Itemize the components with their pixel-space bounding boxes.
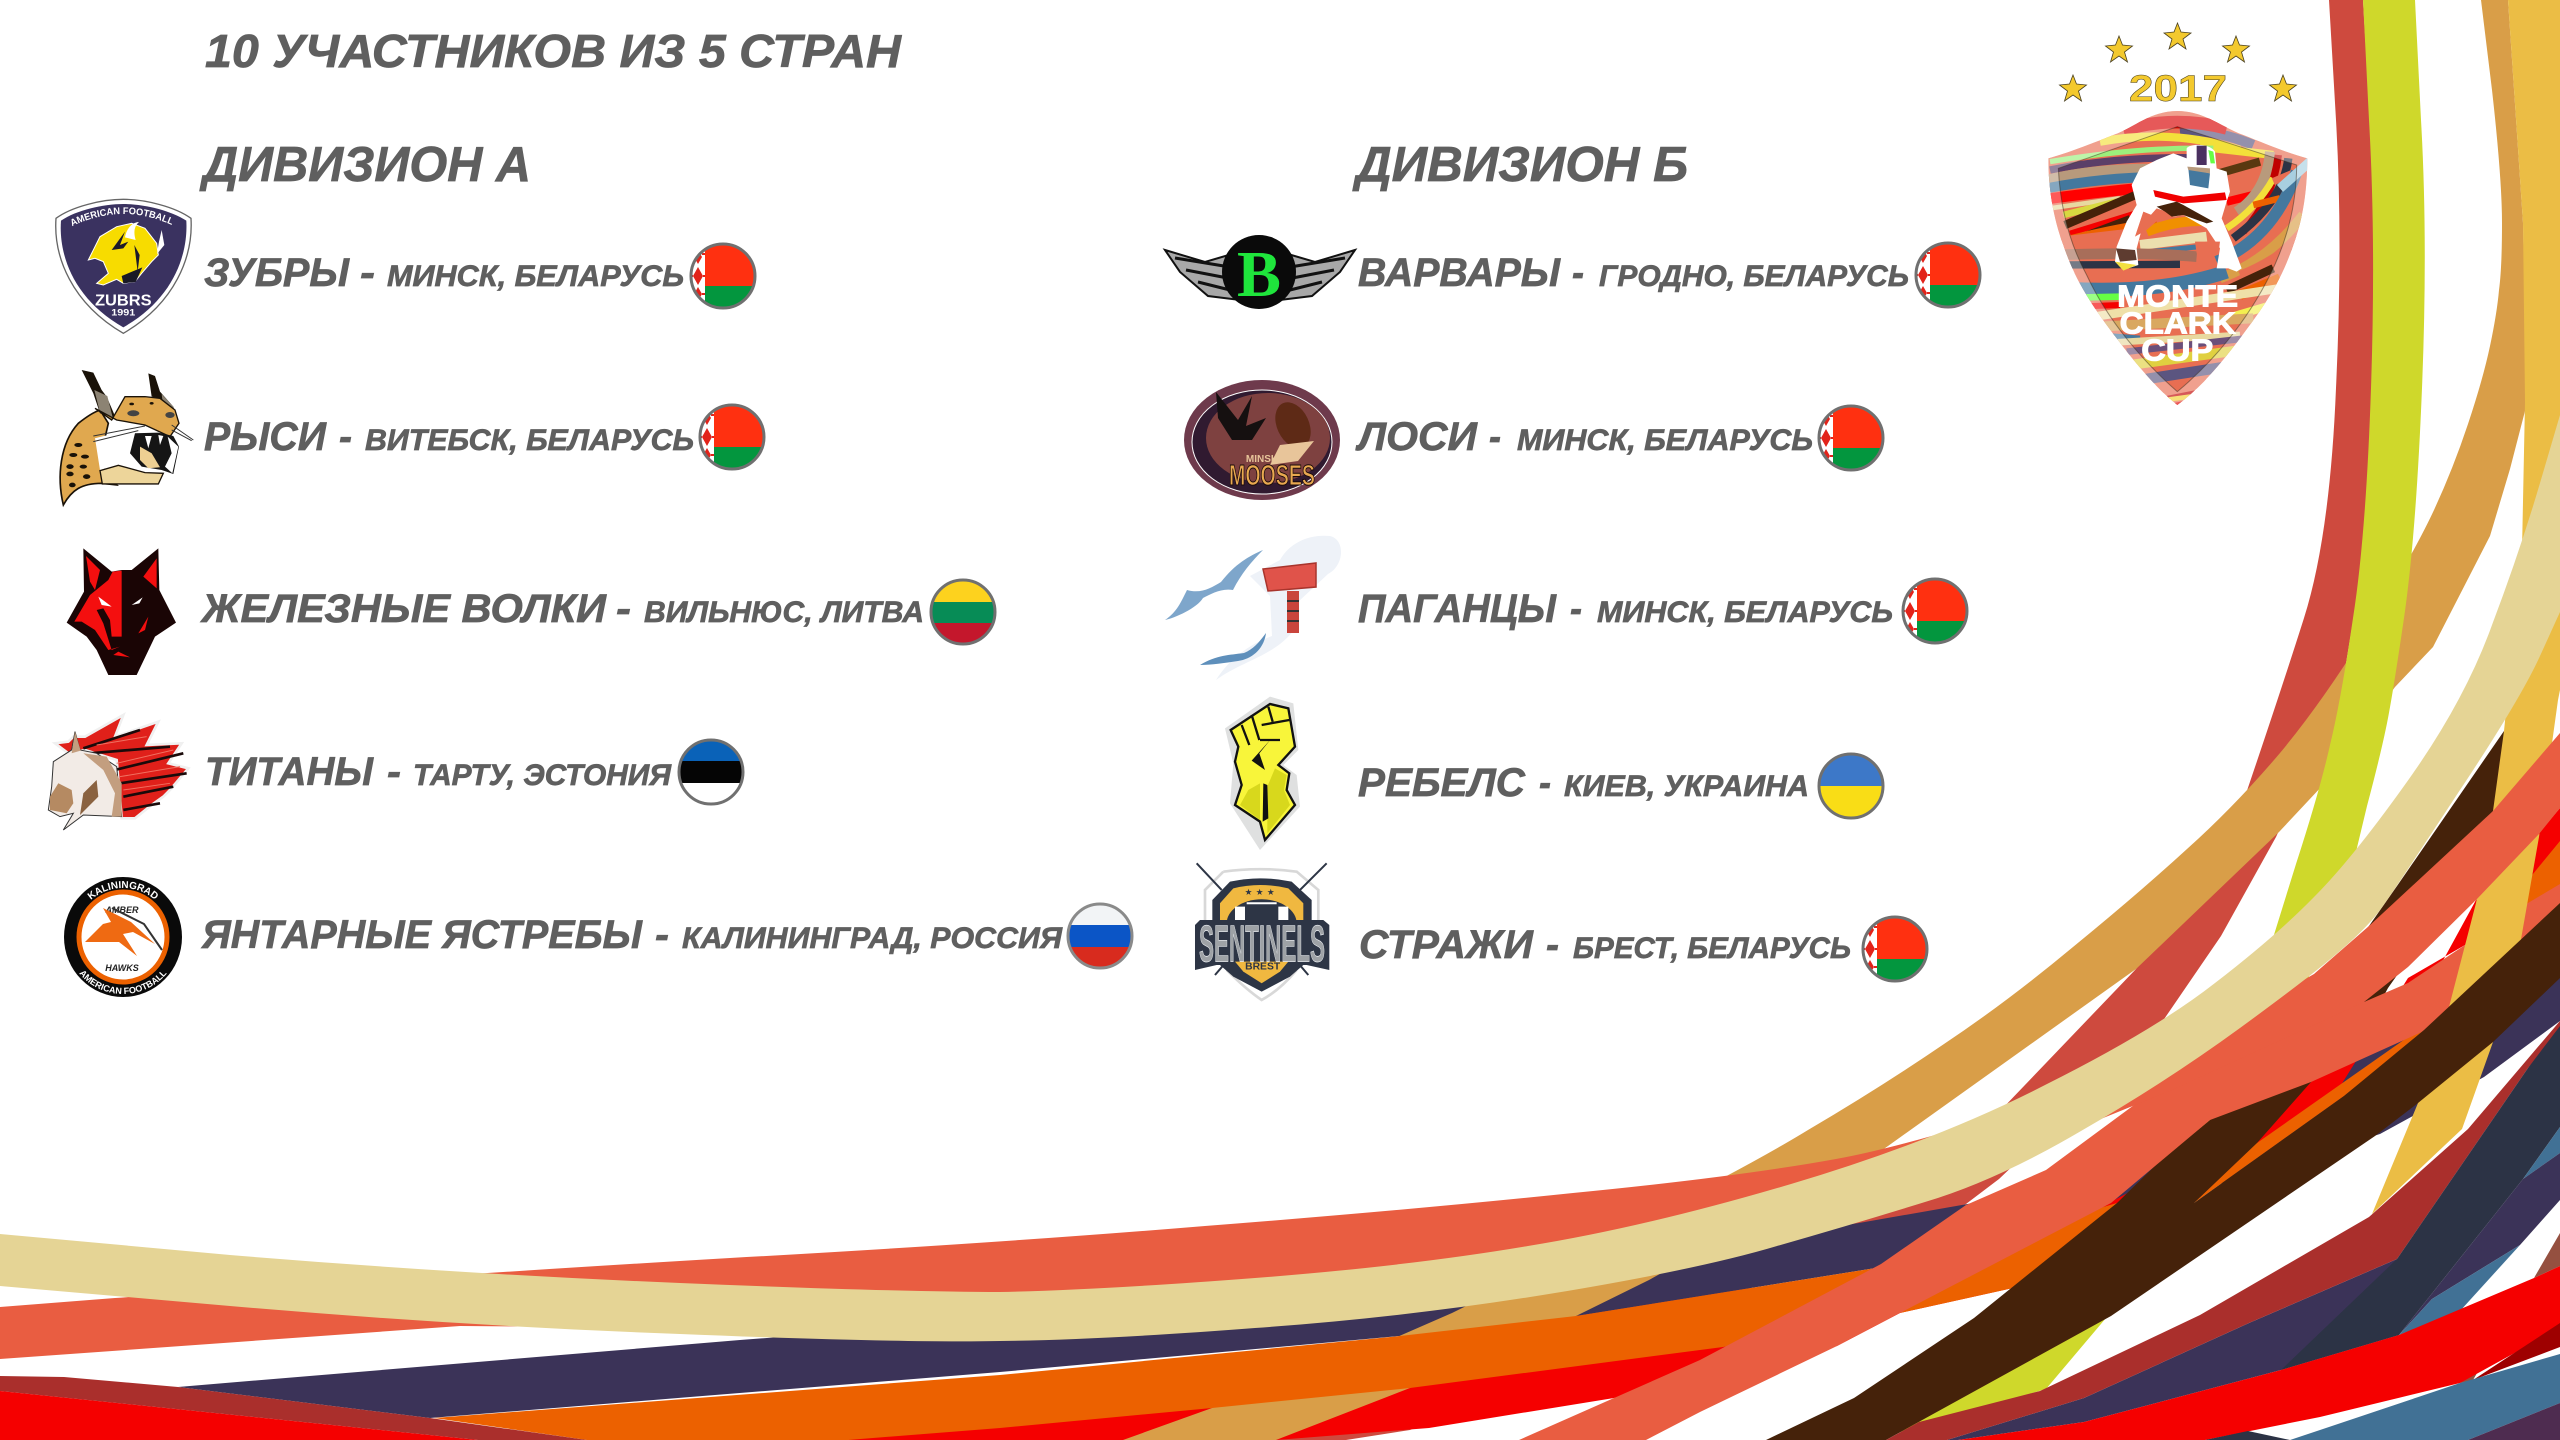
- team row: Рыси: [60, 370, 764, 505]
- team name: [205, 750, 672, 794]
- ribbon: blue sliver: [2523, 1127, 2560, 1179]
- logo: Pagans: [1165, 536, 1341, 680]
- team row: Паганцы: [1165, 536, 1967, 680]
- cup name: CLARK: [2120, 306, 2236, 341]
- ribbon: bottom navy: [1947, 1259, 2420, 1440]
- ribbon: deep red: [2473, 1323, 2560, 1380]
- team name: МИНСК, БЕЛАРУСЬ: [387, 260, 684, 293]
- logo: Monte Clark Cup: [2040, 23, 2315, 410]
- team name: [1358, 587, 1893, 631]
- team name: ЖЕЛЕЗНЫЕ ВОЛКИ: [200, 587, 607, 631]
- logo: Sentinels: BREST: [1245, 961, 1281, 972]
- team name: ПАГАНЦЫ: [1358, 587, 1557, 631]
- team row: Железные волки: [67, 548, 995, 675]
- team name: ВАРВАРЫ: [1358, 251, 1561, 295]
- team name: МИНСК, БЕЛАРУСЬ: [1597, 596, 1893, 629]
- team name: -: [339, 415, 352, 459]
- team name: РЫСИ: [204, 415, 327, 459]
- ribbon: brick: [1200, 0, 2377, 1440]
- logo: Mooses: MINSK: [1246, 454, 1279, 465]
- ribbon: bright red: [1958, 1266, 2560, 1440]
- cup name: CUP: [2141, 333, 2213, 368]
- year: 2017: [2129, 68, 2227, 109]
- team name: [201, 913, 1063, 957]
- stars: [2060, 23, 2296, 101]
- flag: Belarus: [691, 244, 755, 308]
- shield: [2040, 105, 2315, 410]
- team name: [204, 415, 694, 459]
- logo: Lynx: [60, 370, 193, 505]
- flag: Belarus: [1819, 406, 1883, 470]
- ribbon: upper coral: [0, 733, 2560, 1359]
- ribbon: brown triangles: [2460, 1233, 2560, 1383]
- team name: ВИТЕБСК, БЕЛАРУСЬ: [365, 424, 694, 457]
- team row: Лоси: [1184, 380, 1883, 500]
- heading: division B: ДИВИЗИОН Б: [1352, 138, 1688, 192]
- logo: Rebels: [1225, 697, 1300, 850]
- team row: Ребелс: [1225, 697, 1883, 850]
- ribbon: slate corner: [2205, 1431, 2290, 1440]
- team name: ТАРТУ, ЭСТОНИЯ: [413, 759, 672, 792]
- logo: Zubrs: AMERICAN FOOTBALL: [72, 207, 172, 226]
- team name: -: [1539, 761, 1551, 805]
- team name: СТРАЖИ: [1359, 923, 1534, 967]
- logo: Iron Wolves: [67, 548, 176, 675]
- flag: Ukraine: [1819, 754, 1883, 818]
- ribbon: dark red: [1886, 1021, 2560, 1440]
- team name: ВИЛЬНЮС, ЛИТВА: [644, 596, 924, 629]
- team name: [1358, 251, 1909, 295]
- ribbon: bottom-left dark red: [0, 1376, 587, 1440]
- ribbon: thin brown: [2117, 690, 2540, 1203]
- logo: Zubrs: ZUBRS: [95, 292, 152, 309]
- logo: Amber Hawks: [64, 877, 182, 997]
- ribbon: lower coral: [1519, 884, 2560, 1440]
- ribbon: lime: [1900, 0, 2425, 1432]
- ribbon: dark slate: [2281, 1026, 2560, 1370]
- ribbon: orange: [434, 841, 2560, 1440]
- team name: [1358, 761, 1809, 805]
- logo: Amber Hawks: HAWKS: [105, 963, 139, 973]
- logo: Amber Hawks: AMBER: [104, 905, 139, 915]
- team name: МИНСК, БЕЛАРУСЬ: [1517, 424, 1813, 457]
- cup name: MONTE: [2117, 279, 2238, 314]
- heading: division A: ДИВИЗИОН А: [199, 138, 531, 192]
- team name: ГРОДНО, БЕЛАРУСЬ: [1599, 260, 1909, 293]
- team name: -: [387, 750, 401, 794]
- logo: Barbarians: [1165, 235, 1355, 311]
- ribbon: beige: [0, 415, 2560, 1341]
- ribbon: lower blue: [2290, 1354, 2560, 1440]
- logo: Zubrs: [55, 198, 192, 334]
- team name: ЛОСИ: [1355, 415, 1478, 459]
- logo: Amber Hawks: KALININGRAD: [87, 881, 158, 900]
- team name: [200, 587, 924, 631]
- ribbon: tan: [1123, 0, 2525, 1440]
- ribbon: navy band right: [2399, 1153, 2560, 1335]
- team name: [204, 251, 684, 295]
- logo: Zubrs: 1991: [111, 307, 135, 317]
- logo: Titans: [48, 715, 188, 830]
- ribbon: blue band: [2399, 1245, 2520, 1335]
- ribbon: navy: [178, 930, 2560, 1418]
- team name: -: [1572, 251, 1584, 295]
- team name: ЯНТАРНЫЕ ЯСТРЕБЫ: [201, 913, 643, 957]
- flag: Belarus: [700, 405, 764, 469]
- team name: -: [1546, 923, 1559, 967]
- team row: Стражи: [1195, 863, 1927, 1000]
- team row: Стражи: SENTINELS: [1199, 915, 1325, 973]
- ribbon: big brown: [1766, 903, 2560, 1440]
- team name: -: [655, 913, 669, 957]
- flag: Lithuania: [931, 580, 995, 644]
- logo: Sentinels: ★★★: [1245, 888, 1278, 898]
- team name: БРЕСТ, БЕЛАРУСЬ: [1573, 932, 1851, 965]
- logo: Amber Hawks: AMERICAN FOOTBALL: [79, 971, 167, 994]
- flag: Estonia: [679, 740, 743, 804]
- cup name: [2117, 279, 2238, 368]
- team name: -: [616, 587, 631, 631]
- team name: -: [1489, 415, 1501, 459]
- ribbon: bottom-left red: [0, 1391, 478, 1440]
- team name: ЗУБРЫ: [204, 251, 350, 295]
- team row: Титаны: [48, 715, 743, 830]
- team name: ТИТАНЫ: [205, 750, 374, 794]
- player: [2115, 145, 2242, 272]
- flag: Russia: [1068, 904, 1132, 968]
- ribbon: red: [848, 808, 2560, 1440]
- team row: Зубры: [55, 198, 756, 334]
- team name: -: [1570, 587, 1582, 631]
- team row: Варвары: [1165, 235, 1980, 311]
- team name: РЕБЕЛС: [1358, 761, 1526, 805]
- team name: -: [360, 251, 375, 295]
- team row: Янтарные ястребы: [64, 877, 1134, 997]
- team name: КИЕВ, УКРАИНА: [1564, 770, 1809, 803]
- team name: [1355, 415, 1813, 459]
- logo: Sentinels: [1195, 863, 1329, 1000]
- team name: КАЛИНИНГРАД, РОССИЯ: [682, 922, 1063, 955]
- ribbon: gold: [2340, 0, 2560, 1260]
- flag: Belarus: [1903, 579, 1967, 643]
- logo: Mooses: MOOSES: [1229, 460, 1315, 492]
- logo: Mooses: [1184, 380, 1340, 500]
- team name: [1359, 923, 1851, 967]
- logo: Barbarians: B: [1237, 238, 1281, 311]
- ribbon: plum corner: [2468, 1403, 2560, 1440]
- title: 10 УЧАСТНИКОВ ИЗ 5 СТРАН: [205, 25, 902, 77]
- flag: Belarus: [1863, 917, 1927, 981]
- flag: Belarus: [1916, 243, 1980, 307]
